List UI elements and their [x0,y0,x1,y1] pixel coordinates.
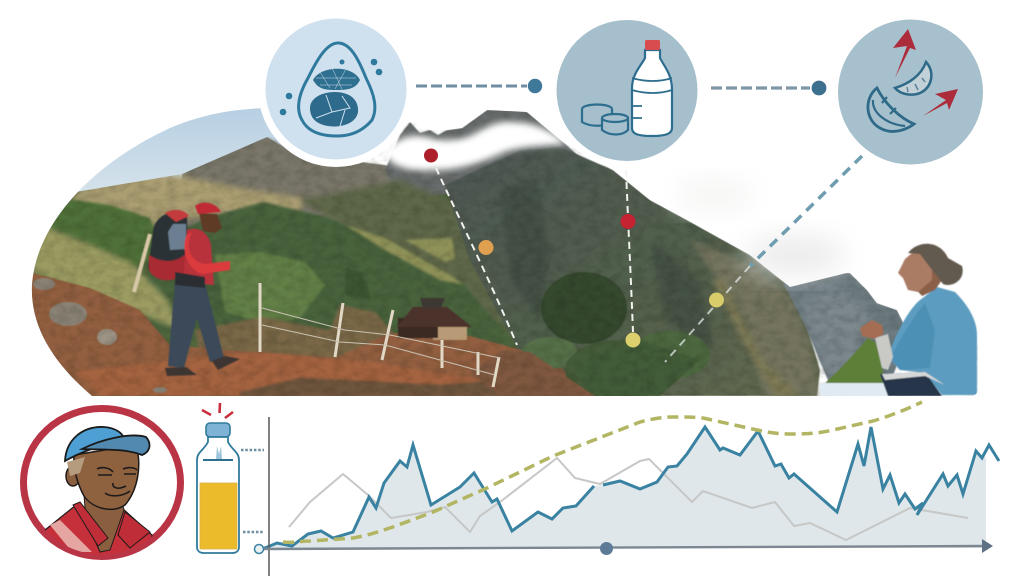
right mountain [783,270,908,385]
blue series part one [260,445,594,550]
base green ground [28,190,528,396]
hair [908,244,963,285]
dotted levels [241,450,264,532]
bottle gauge [197,403,264,553]
clouds on summit [384,122,566,170]
burst ticks [202,403,233,418]
axis origin marker [254,544,264,554]
torso [183,229,214,285]
dark bank [239,377,500,396]
drop outline [299,43,375,136]
particles [280,59,382,115]
connector: circle one to two [416,79,542,93]
cap [206,423,230,437]
legs [168,279,224,368]
yellow liquid [200,483,237,549]
shirt [45,505,152,560]
sky [166,137,284,178]
sideburn [67,457,85,476]
circle: citrus icon with arrows [838,20,983,164]
ear [66,466,80,486]
house [397,298,472,340]
boots [165,367,197,376]
horizontal axis with arrow [262,546,984,549]
grey baseline series [289,458,968,540]
chart: hydration lines over time [254,402,999,576]
cups [582,104,628,134]
bushes right of hiker [215,252,325,325]
rocks [33,278,167,393]
mountain lit flank [690,240,818,396]
middle olive slope [300,178,504,326]
summit peaks [385,110,578,196]
circle: bottle and cups icon [549,12,705,168]
upper mass [313,69,360,90]
area under blue line [262,427,986,548]
neck [84,495,124,552]
bank behind fence [194,304,394,358]
lower mass [310,92,358,126]
sweater [888,287,977,395]
bottle [632,50,672,136]
body [197,437,239,553]
tan patches [345,225,465,285]
facial features [97,468,137,496]
green dashed trend [283,402,922,542]
collar [73,502,150,548]
citrus half bottom [868,88,914,131]
cover texture over sky and white [78,108,274,192]
grass slope [30,226,180,330]
tan hillside [60,172,305,225]
road [75,352,495,396]
hiker [134,203,240,376]
fog right of mountain [745,237,845,273]
dirt in front of trees [500,350,595,396]
backpack [148,214,188,270]
timeline marker [600,542,613,555]
neck [912,262,942,296]
connector: circle two to three [711,81,826,95]
gullies [500,180,715,350]
woman [820,244,977,396]
photo: mountain trail scene [28,100,980,400]
face [74,445,139,509]
mottled photo texture [30,105,980,397]
cap [65,427,124,461]
face [898,248,932,292]
main dark mountain [445,147,820,396]
green hill [187,200,498,328]
route: red and orange dots with white dashed lines [424,148,862,362]
dirt hillside [28,272,595,396]
head [199,213,222,233]
citrus wedge top [895,62,931,95]
forest left [52,198,153,263]
white container [820,383,888,396]
fence [260,283,500,387]
vertical axis [268,417,270,576]
water line [203,459,233,461]
far rocky ridge [182,137,392,227]
arrows [893,29,916,78]
lap [880,372,942,396]
hands [860,320,884,339]
blue series part two [603,427,999,515]
circle: food and digestion icon [258,11,414,167]
knit cuff [875,334,893,370]
portrait: hiker illustration [24,408,180,560]
trees [522,272,710,400]
plant [825,338,884,384]
ochre strip [712,280,800,396]
